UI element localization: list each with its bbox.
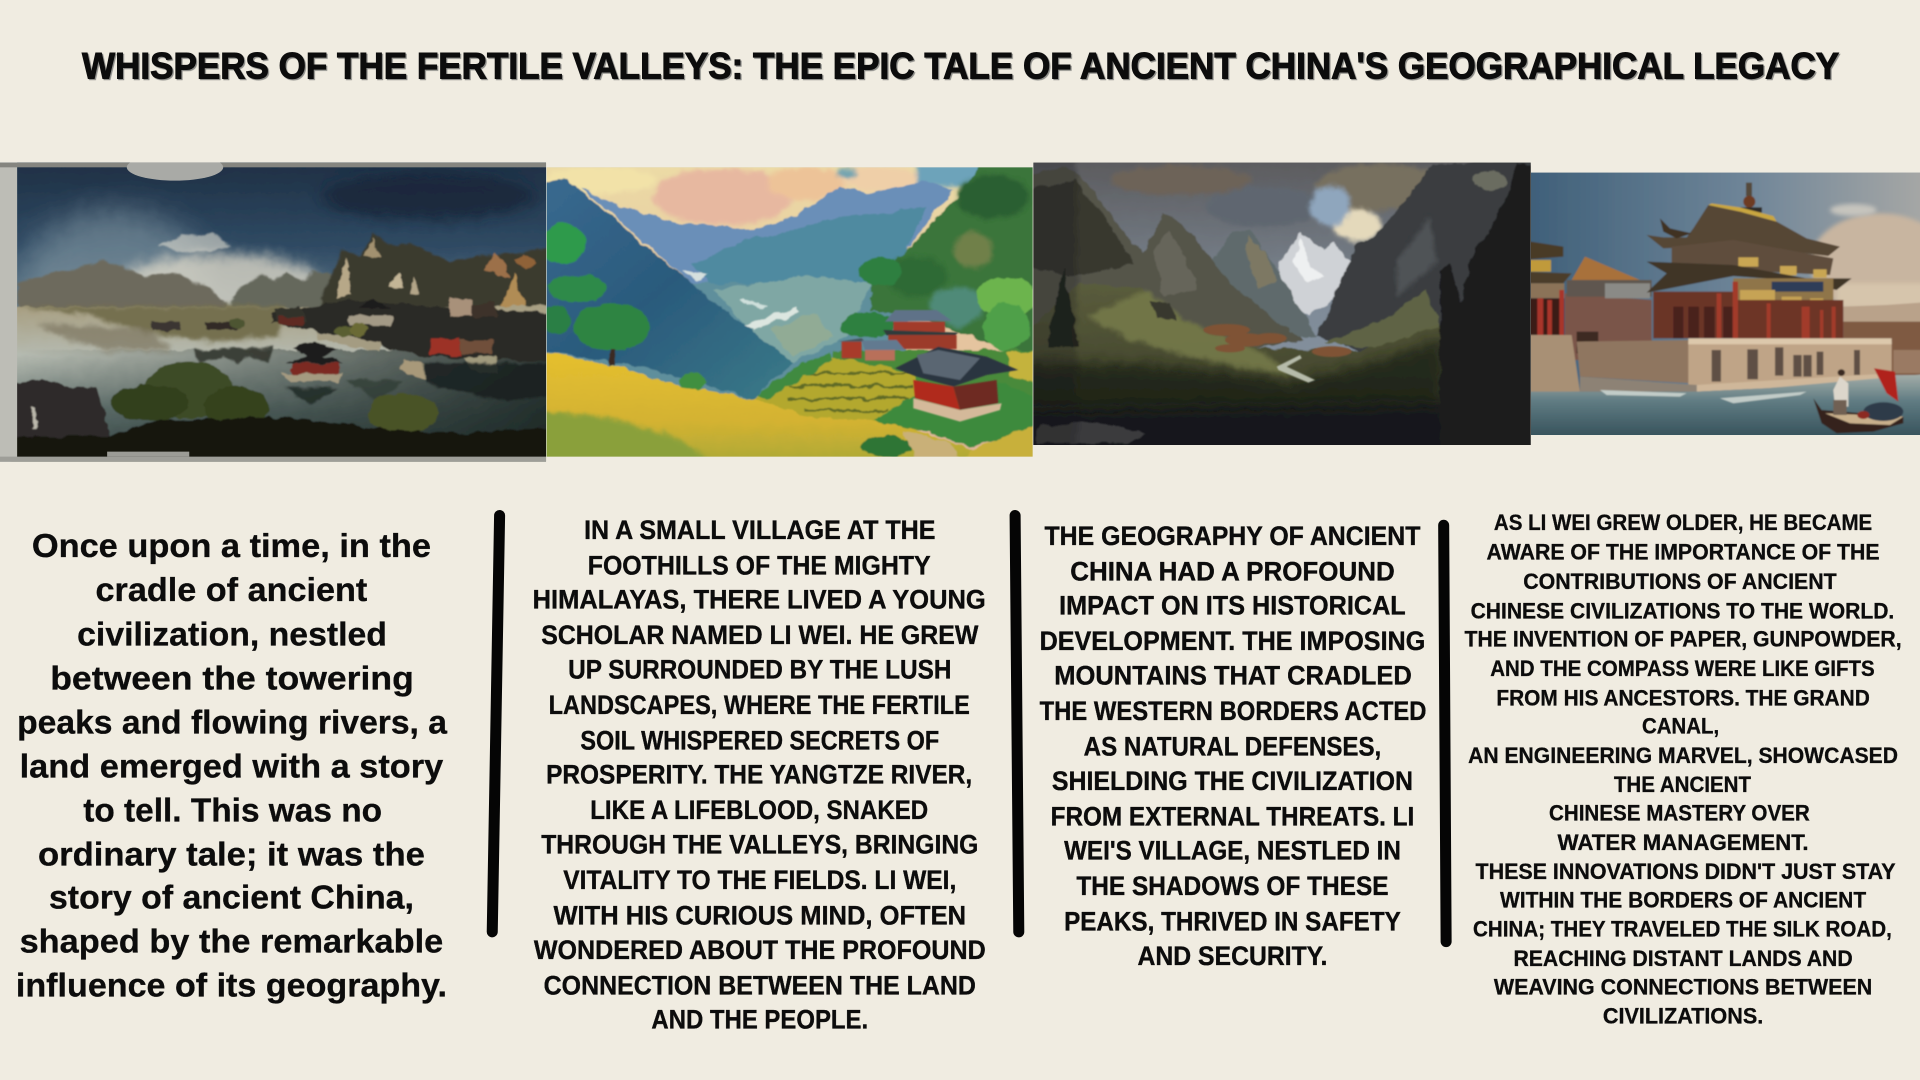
text block: introduction: cradle of ancient: [96, 572, 367, 609]
text block: geography: MOUNTAINS THAT CRADLED: [1054, 660, 1412, 690]
text block: contributions to the world: AS LI WEI GREW OLDER, HE BECAME: [1494, 510, 1872, 535]
text block: geography: IMPACT ON ITS HISTORICAL: [1059, 591, 1406, 621]
text block: Li Wei's village: FOOTHILLS OF THE MIGHTY: [588, 550, 931, 580]
text block: contributions to the world: CANAL,: [1642, 713, 1719, 738]
divider 3: [1444, 525, 1446, 942]
image: lakeside village with karst mountains: [0, 162, 546, 462]
text block: contributions to the world: AN ENGINEERING MARVEL, SHOWCASED: [1468, 743, 1898, 768]
text block: introduction: story of ancient China,: [49, 880, 414, 917]
text block: contributions to the world: THESE INNOVATIONS DIDN'T JUST STAY: [1476, 859, 1896, 884]
text block: contributions to the world: CHINESE MASTERY OVER: [1549, 800, 1810, 825]
text block: geography: DEVELOPMENT. THE IMPOSING: [1040, 626, 1425, 656]
text block: contributions to the world: AND THE COMPASS WERE LIKE GIFTS: [1490, 656, 1875, 681]
text block: contributions to the world: CIVILIZATIONS.: [1603, 1004, 1763, 1029]
text block: Li Wei's village: IN A SMALL VILLAGE AT THE: [584, 515, 936, 545]
text block: contributions to the world: FROM HIS ANCESTORS. THE GRAND: [1496, 685, 1870, 710]
text block: Li Wei's village: WONDERED ABOUT THE PROFOUND: [534, 935, 986, 965]
text block: Li Wei's village: UP SURROUNDED BY THE LUSH: [568, 654, 951, 684]
text block: geography: THE SHADOWS OF THESE: [1076, 871, 1389, 901]
text block: introduction: between the towering: [50, 660, 414, 697]
text block: introduction: ordinary tale; it was the: [38, 837, 425, 874]
text block: contributions to the world: WITHIN THE BORDERS OF ANCIENT: [1500, 887, 1867, 912]
text block: Li Wei's village: WITH HIS CURIOUS MIND, OFTEN: [553, 900, 966, 930]
text block: geography: SHIELDING THE CIVILIZATION: [1052, 766, 1413, 796]
text block: Li Wei's village: THROUGH THE VALLEYS, BRINGING: [541, 829, 978, 859]
text block: Li Wei's village: LANDSCAPES, WHERE THE FERTILE: [549, 690, 970, 720]
text block: Li Wei's village: AND THE PEOPLE.: [651, 1005, 868, 1035]
text block: contributions to the world: WEAVING CONNECTIONS BETWEEN: [1494, 974, 1872, 999]
text block: introduction: land emerged with a story: [20, 749, 444, 786]
text block: contributions to the world: [1464, 510, 1902, 1029]
text block: contributions to the world: AWARE OF THE IMPORTANCE OF THE: [1487, 540, 1880, 565]
text block: introduction: influence of its geography.: [16, 968, 447, 1005]
text block: contributions to the world: WATER MANAGEMENT.: [1558, 830, 1809, 855]
text block: contributions to the world: THE ANCIENT: [1614, 772, 1752, 797]
title: WHISPERS OF THE FERTILE VALLEYS: THE EPIC TALE OF ANCIENT CHINA'S GEOGRAPHICAL LEGACY: [82, 45, 1839, 86]
text block: introduction: to tell. This was no: [83, 793, 382, 830]
text block: contributions to the world: CHINA; THEY TRAVELED THE SILK ROAD,: [1473, 917, 1892, 942]
text block: geography: AS NATURAL DEFENSES,: [1084, 732, 1381, 762]
text block: contributions to the world: CONTRIBUTIONS OF ANCIENT: [1523, 569, 1837, 594]
text block: geography: PEAKS, THRIVED IN SAFETY: [1064, 907, 1401, 937]
text block: geography: CHINA HAD A PROFOUND: [1070, 556, 1395, 586]
text block: contributions to the world: REACHING DISTANT LANDS AND: [1513, 946, 1853, 971]
text block: geography: WEI'S VILLAGE, NESTLED IN: [1064, 836, 1401, 866]
divider 1: [492, 516, 500, 932]
text block: introduction: peaks and flowing rivers, a: [17, 704, 447, 741]
text block: Li Wei's village: LIKE A LIFEBLOOD, SNAKED: [590, 795, 928, 825]
text block: introduction: shaped by the remarkable: [20, 924, 443, 961]
text block: contributions to the world: CHINESE CIVILIZATIONS TO THE WORLD.: [1471, 598, 1894, 623]
text block: geography: THE WESTERN BORDERS ACTED: [1040, 696, 1427, 726]
text block: geography: FROM EXTERNAL THREATS. LI: [1051, 801, 1414, 831]
text block: introduction: civilization, nestled: [77, 616, 387, 653]
text block: Li Wei's village: PROSPERITY. THE YANGTZE RIVER,: [546, 760, 972, 790]
village houses: [1203, 324, 1352, 383]
text block: Li Wei's village: HIMALAYAS, THERE LIVED A YOUNG: [533, 585, 986, 615]
text block: contributions to the world: THE INVENTION OF PAPER, GUNPOWDER,: [1464, 627, 1902, 652]
temple group: [838, 310, 1018, 422]
palace main hall: [1746, 183, 1752, 196]
text block: Li Wei's village: SCHOLAR NAMED LI WEI. HE GREW: [541, 620, 979, 650]
text block: introduction: [16, 528, 447, 1005]
image: valley with rice terraces and temple: [546, 167, 1033, 457]
text block: geography: AND SECURITY.: [1138, 941, 1327, 971]
text block: Li Wei's village: SOIL WHISPERED SECRETS OF: [580, 725, 939, 755]
text block: Li Wei's village: CONNECTION BETWEEN THE LAND: [544, 970, 976, 1000]
image: mountain village at dusk: [1033, 162, 1531, 445]
image: palace on the river with boat: [1530, 172, 1920, 435]
text block: Li Wei's village: [533, 515, 986, 1035]
text block: geography: [1040, 521, 1427, 971]
text block: Li Wei's village: VITALITY TO THE FIELDS. LI WEI,: [563, 865, 956, 895]
text block: geography: THE GEOGRAPHY OF ANCIENT: [1044, 521, 1421, 551]
text block: introduction: Once upon a time, in the: [32, 528, 431, 565]
divider 2: [1015, 516, 1019, 932]
